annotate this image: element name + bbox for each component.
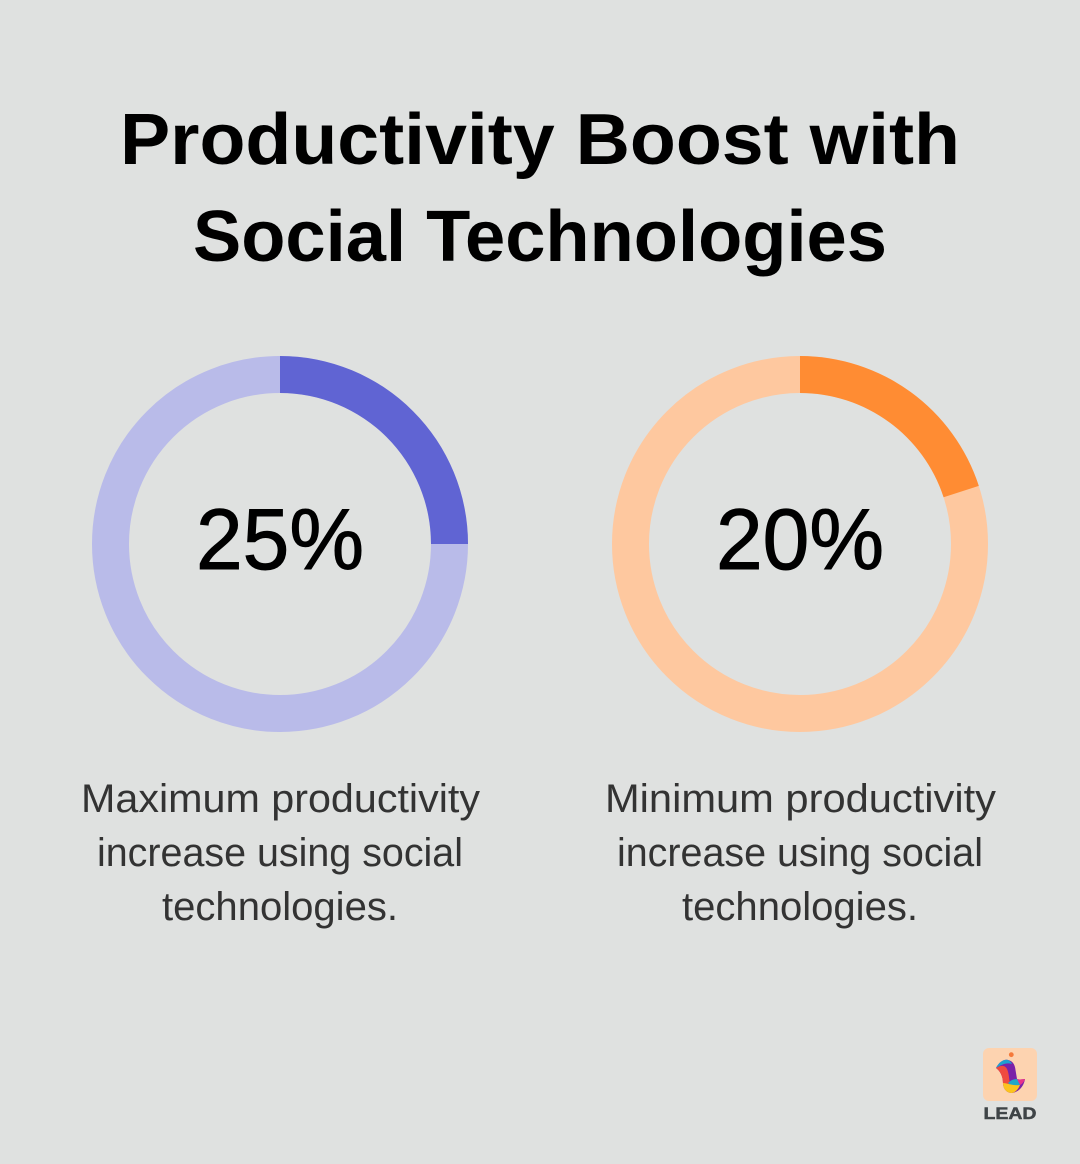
description: minimum: Minimum productivity	[605, 777, 996, 821]
title: Social Technologies	[193, 197, 887, 277]
panel: maximum productivity	[81, 356, 480, 929]
description: minimum: increase using social	[617, 831, 983, 875]
description: maximum	[81, 777, 480, 929]
title: Productivity Boost with	[120, 100, 960, 180]
logo wordmark: LEAD	[984, 1104, 1036, 1123]
value: 25%: 25%	[196, 492, 364, 588]
panel: minimum productivity	[605, 356, 996, 929]
logo: LEAD	[983, 1048, 1037, 1123]
description: minimum: technologies.	[682, 885, 918, 929]
donut chart: 20%	[630, 356, 979, 714]
icon: bird logo	[983, 1048, 1037, 1101]
donut chart: 25%	[110, 356, 468, 714]
description: maximum: technologies.	[162, 885, 398, 929]
description: minimum	[605, 777, 996, 929]
title	[120, 100, 960, 277]
value: 20%: 20%	[716, 492, 884, 588]
description: maximum: Maximum productivity	[81, 777, 480, 821]
description: maximum: increase using social	[97, 831, 463, 875]
